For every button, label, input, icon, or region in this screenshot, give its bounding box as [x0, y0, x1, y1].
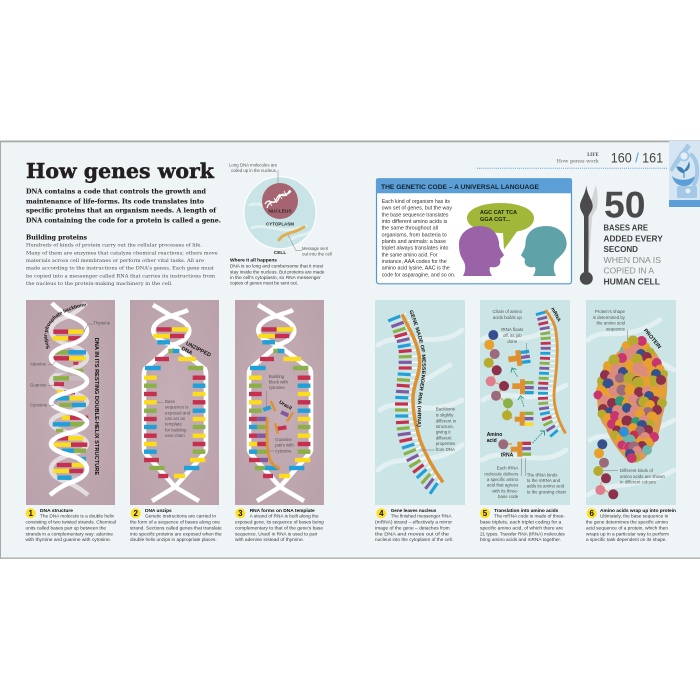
running header: 160 / 161: [611, 150, 663, 166]
sequence label: template: [165, 422, 182, 427]
backbone label: Backbone: [436, 407, 456, 412]
label: message: Message sent: [302, 246, 329, 251]
text block: where it all happens: [230, 258, 325, 286]
caption 6: Amino acids wrap up into protein: [600, 508, 676, 514]
sequence label: exposed and: [165, 410, 191, 415]
mRNA label: mRNA: [549, 307, 562, 323]
genetic code text: code for asparagine, and so on.: [382, 272, 455, 278]
sequence label: [157, 399, 191, 438]
mRNA backbone: [546, 310, 566, 433]
backbone label: different: [436, 435, 452, 440]
labels: off, its job: [503, 333, 522, 338]
text block: building proteins: Hundreds of kinds of protein carry out the cellular processes of life.: [26, 243, 203, 249]
stat: 50 bases: ADDED EVERY: [604, 234, 663, 243]
caption 3: [235, 508, 324, 543]
building block label: Building: [269, 374, 285, 379]
label: long DNA molecules: coiled up in the nucleus.: [231, 168, 277, 173]
caption 3: A strand of RNA is built along the: [250, 514, 319, 520]
caption 4: 4: [379, 509, 384, 518]
caption 4: (mRNA) strand – effectively a mirror: [375, 520, 452, 526]
caption 5: [480, 508, 565, 543]
gene heading: GENE MADE OF MESSENGER RNA (mRNA): [410, 310, 426, 427]
title: How genes work: [26, 159, 215, 183]
backbone label: from DNA: [436, 447, 455, 452]
label: message: out into the cell: [302, 252, 332, 257]
nucleus: [262, 183, 298, 219]
intro text: [26, 188, 221, 224]
protein mass: [594, 336, 668, 463]
genetic code header: [376, 178, 572, 193]
running header: How genes work: [557, 159, 599, 164]
genetic code text: organisms, from bacteria to: [382, 232, 447, 238]
running header: LIFE: [587, 153, 599, 158]
caption 1: [26, 508, 116, 543]
protein shape label: [593, 309, 627, 340]
panel: the genetic code: [376, 178, 572, 284]
backbone label: giving it: [436, 430, 451, 435]
stat: 50 bases: BASES ARE: [604, 224, 649, 233]
text block: where it all happens: in the cell's cytoplasm, so RNA messenger: [230, 275, 321, 281]
caption 2: into specific proteins are exposed when the: [130, 531, 222, 537]
caption 5: base triplets, each triplet coding for a: [480, 520, 562, 526]
kinds of amino acids label: amino acids are shown: [620, 474, 665, 479]
caption 2: Genetic instructions are carried in: [145, 514, 216, 520]
messenger strand: [279, 227, 304, 240]
genetic code text: plants and animals: a base: [382, 239, 446, 245]
panel: translation into amino acids: [480, 300, 570, 505]
labels: Chain of amino: [493, 309, 523, 314]
genetic code text: into different amino acids is: [382, 219, 448, 225]
caption 6: acid sequence of a protein, which then: [586, 526, 668, 532]
genetic code text: Each kind of organism has its: [382, 199, 450, 205]
running header: [477, 150, 668, 168]
genetic code text: the same amino acid. For: [382, 252, 438, 258]
icon: metronome pointer: [580, 185, 598, 285]
base labels: Adenine: [30, 362, 47, 367]
building block label: cytosine: [269, 385, 285, 390]
backbone label: is slightly: [436, 412, 454, 418]
caption 4: Gene leaves nucleus: [391, 508, 437, 514]
guanine label: cytosine: [275, 448, 292, 453]
text block: building proteins: Building proteins: [26, 233, 87, 241]
base labels: [30, 320, 111, 408]
intro text: DNA containing the code for a protein is called a gene.: [26, 216, 221, 224]
caption 6: Ultimately, the base sequence in: [600, 514, 669, 520]
label: long DNA molecules: Long DNA molecules are: [229, 163, 278, 168]
mRNA backbone: [402, 314, 443, 482]
genetic code text: triplet always translates into: [382, 246, 448, 252]
text block: where it all happens: Where it all happens: [230, 258, 277, 264]
page background: [0, 141, 700, 559]
caption 6: [586, 508, 676, 543]
speech bubble: [467, 203, 534, 250]
speech bubble: AGC CAT TCA: [480, 210, 517, 216]
labels: acid that agrees: [487, 483, 519, 488]
building block label: block with: [269, 380, 289, 385]
sequence label: new chain: [165, 433, 185, 438]
panel: DNA unzips: [130, 300, 219, 505]
caption 4: the DNA and moves out of the: [375, 531, 449, 537]
caption 1: DNA structure: [40, 508, 73, 514]
labels: adds its amino acid: [527, 484, 565, 489]
labels: tRNA floats: [501, 327, 524, 332]
labels: to the mRNA and: [527, 478, 561, 483]
text block: where it all happens: copies of genes must be sent out.: [230, 280, 298, 286]
labels: acid: [487, 438, 497, 444]
labels: The tRNA binds: [527, 472, 558, 477]
unzipped label: UNZIPPED: [185, 341, 212, 359]
tRNA units: [507, 349, 534, 457]
caption 5: Translation into amino acids: [494, 508, 559, 514]
labels: [484, 309, 567, 499]
text block: building proteins: made according to the instructions of the DNA's genes. Each gene must: [26, 266, 214, 272]
teal head: [521, 226, 567, 276]
kinds of amino acids label: [603, 468, 665, 485]
caption 4: The finished messenger RNA: [391, 514, 452, 520]
building block label: [266, 374, 289, 408]
caption 3: RNA forms on DNA template: [250, 508, 315, 514]
panel: RNA forms on DNA template: [235, 300, 324, 505]
caption 3: sequence. Uracil in RNA is used to pair: [235, 531, 318, 537]
caption 1: 1: [28, 509, 33, 518]
backbone label: Sugar-phosphate backbone: [44, 304, 86, 349]
stat: 50 bases: [604, 185, 663, 286]
free building blocks: [263, 401, 294, 434]
labels: Each tRNA: [497, 466, 518, 471]
backbone label: structure,: [436, 424, 454, 429]
mRNA rungs: [388, 312, 442, 495]
caption 6: 6: [589, 509, 594, 518]
caption 4: image of the gene – detaches from: [375, 526, 450, 532]
vertical heading: DNA IN ITS RESTING DOUBLE-HELIX STRUCTURE: [93, 338, 99, 476]
unzipped label: DNA: [180, 346, 193, 357]
labels: to the growing chain: [527, 489, 567, 494]
caption 4: [375, 508, 453, 543]
caption 3: exposed gene, its sequence of bases being: [235, 520, 324, 526]
base labels: Cytosine: [30, 403, 48, 408]
label: message: [302, 246, 332, 257]
stat: 50 bases: HUMAN CELL: [604, 277, 660, 286]
text block: building proteins: materials across cell membranes or perform other vital tasks. All are: [26, 258, 204, 264]
caption 6: wraps up in a particular way to perform: [586, 531, 669, 537]
sequence label: Base: [165, 399, 176, 404]
cell label: CELL: [274, 250, 286, 256]
RNA strand: [267, 418, 280, 469]
protein label: PROTEIN: [642, 328, 662, 350]
genetic code text: amino acid lysine, AAC is the: [382, 266, 450, 272]
labels: base code: [498, 494, 519, 499]
caption 2: [130, 508, 222, 543]
base labels: Thymine: [93, 320, 111, 325]
protein shape label: is determined by: [593, 315, 626, 320]
caption 6: the gene determines the specific amino: [586, 520, 668, 526]
caption 2: strand. Sections called genes that translate: [130, 526, 222, 532]
genetic code text: [382, 199, 455, 278]
caption 5: 21 types. Transfer RNA (tRNA) molecules: [480, 531, 565, 537]
nucleus label: NUCLEUS: [268, 209, 292, 215]
caption 3: with adenine instead of thymine.: [235, 537, 304, 543]
panel: amino acids wrap up into protein: [586, 300, 676, 505]
caption 5: The mRNA code is made of three-: [494, 514, 565, 520]
sequence label: sequence is: [165, 405, 189, 410]
genetic code text: the base sequence translates: [382, 212, 449, 218]
sequence label: can act as: [165, 416, 186, 421]
backbone label: [420, 407, 457, 452]
caption 5: bring amino acids and mRNA together.: [480, 537, 561, 543]
genetic code text: instance, AAA codes for the: [382, 259, 447, 265]
left strand bases: [144, 376, 168, 478]
intro text: specific proteins that an organism needs. A length of: [26, 207, 217, 215]
labels: acids builds up: [493, 315, 522, 320]
caption 2: 2: [133, 509, 138, 518]
labels: tRNA: [501, 453, 514, 459]
caption 3: complementary to that of the gene's base: [235, 526, 323, 532]
caption 3: 3: [238, 509, 243, 518]
arrows: [511, 368, 544, 443]
stat: 50 bases: COPIED IN A: [604, 267, 655, 276]
caption 4: nucleus into the cytoplasm of the cell.: [375, 537, 453, 543]
text block: building proteins: the nucleus to the protein-making machinery in the cell.: [26, 281, 173, 287]
guanine label: Guanine: [275, 437, 292, 442]
caption 1: consisting of two twisted strands. Chemical: [26, 520, 116, 526]
panel: DNA structure: [26, 300, 115, 505]
caption 1: strands in a complementary way: adenine: [26, 531, 113, 537]
genetic code text: own set of genes, but the way: [382, 206, 452, 212]
cell circle: [244, 177, 316, 249]
purple head: [459, 226, 504, 276]
text block: where it all happens: stay inside the nucleus. But proteins are made: [230, 269, 325, 275]
unzipped helix: [249, 305, 311, 501]
protein shape label: sequence: [606, 326, 626, 331]
labels: molecule delivers: [484, 471, 519, 476]
text block: building proteins: [26, 233, 218, 287]
cell diagram: [229, 163, 332, 257]
caption 1: units called bases pair up between the: [26, 526, 106, 532]
caption 6: a specific task dependent on its shape.: [586, 537, 667, 543]
protein shape label: Protein's shape: [595, 309, 626, 314]
icon: microscope tab: [669, 141, 700, 207]
kinds of amino acids label: Different kinds of: [620, 468, 654, 473]
speech bubble: GGA CGT...: [480, 217, 511, 223]
caption 2: the form of a sequence of bases along one: [130, 520, 220, 526]
stat: 50 bases: SECOND: [604, 245, 638, 254]
unzipped helix: [144, 305, 206, 501]
text block: building proteins: Many of them are enzymes that catalyze chemical reactions; others move: [26, 250, 218, 256]
stat: 50 bases: WHEN DNA IS: [604, 256, 662, 265]
uracil label: Uracil: [278, 400, 293, 412]
sequence label: for building: [165, 427, 187, 432]
amino acid chain: [484, 330, 513, 449]
text block: where it all happens: DNA is so long and cumbersome that it must: [230, 264, 324, 270]
mRNA rungs: [536, 309, 563, 438]
labels: Amino: [487, 432, 502, 438]
labels: a specific amino: [487, 477, 519, 482]
genetic code text: the same throughout all: [382, 226, 438, 232]
intro text: maintenance of life-forms. Its code translates into: [26, 197, 205, 205]
panel: gene leaves nucleus: [375, 300, 465, 505]
caption 2: DNA unzips: [145, 508, 172, 514]
protein shape label: the amino acid: [596, 321, 626, 326]
label: long DNA molecules: [229, 163, 278, 173]
caption 1: with thymine and guanine with cytosine.: [26, 537, 111, 543]
caption 1: The DNA molecule is a double helix: [40, 514, 115, 520]
cytoplasm label: CYTOPLASM: [266, 222, 294, 228]
text block: building proteins: be copied into a messenger called RNA that carries its instructions from: [26, 273, 216, 279]
labels: with its three-: [492, 488, 519, 493]
template strand bases: [249, 376, 278, 478]
guanine label: pairs with: [275, 443, 294, 448]
caption 5: 5: [483, 509, 488, 518]
guanine label: [268, 437, 294, 453]
backbone label: properties: [436, 441, 456, 446]
backbone label: different in: [436, 418, 457, 423]
kinds of amino acids label: in different colours: [620, 480, 657, 485]
base labels: Guanine: [30, 383, 47, 388]
caption 2: double helix unzips in appropriate places.: [130, 537, 217, 543]
stat: 50 bases: 50: [604, 185, 646, 226]
genetic code header: THE GENETIC CODE – A UNIVERSAL LANGUAGE: [381, 184, 540, 191]
caption 5: specific amino acid, of which there are: [480, 526, 563, 532]
free amino acid chain: [593, 439, 618, 499]
labels: done: [507, 339, 518, 344]
double helix: [50, 303, 88, 495]
intro text: DNA contains a code that controls the growth and: [26, 188, 206, 196]
